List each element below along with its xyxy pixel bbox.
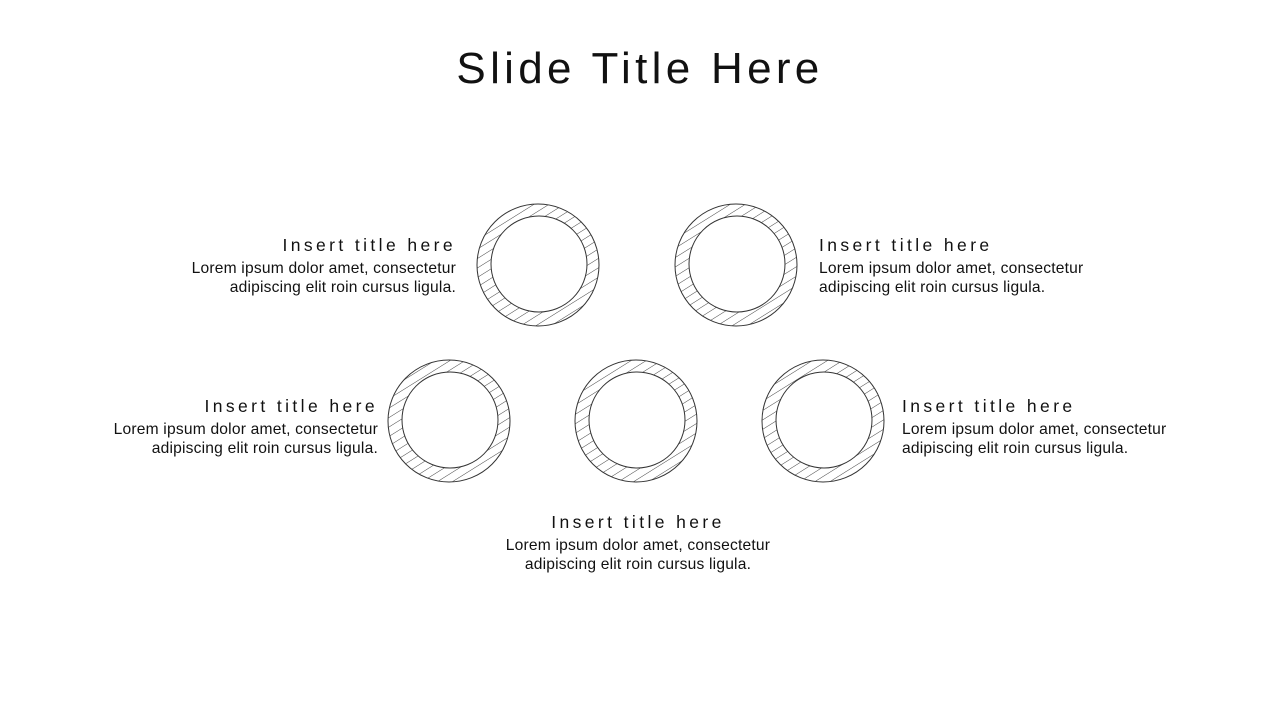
circle 4 [575, 360, 697, 482]
text: top left [192, 235, 456, 296]
circle 5 [762, 360, 884, 482]
text: top right [819, 235, 1083, 296]
text: mid left: Insert title here [204, 396, 378, 416]
circle 1 [477, 204, 599, 326]
circle 3 [388, 360, 510, 482]
circle 2 [675, 204, 797, 326]
text: top right: Insert title here [819, 235, 993, 255]
text: mid left: adipiscing elit roin cursus ligula. [152, 440, 378, 457]
text: top right: adipiscing elit roin cursus ligula. [819, 279, 1045, 296]
text: mid left [114, 396, 378, 457]
text: mid right: adipiscing elit roin cursus ligula. [902, 440, 1128, 457]
title: Slide Title Here [456, 44, 824, 93]
text: bottom center: Lorem ipsum dolor amet, consectetur [506, 537, 770, 554]
text: bottom center: adipiscing elit roin cursus ligula. [525, 556, 751, 573]
text: top right: Lorem ipsum dolor amet, consectetur [819, 260, 1083, 277]
text: mid right: Lorem ipsum dolor amet, consectetur [902, 421, 1166, 438]
text: mid right [902, 396, 1166, 457]
text: bottom center: Insert title here [551, 512, 725, 532]
text: top left: adipiscing elit roin cursus ligula. [230, 279, 456, 296]
text: mid left: Lorem ipsum dolor amet, consectetur [114, 421, 378, 438]
text: top left: Lorem ipsum dolor amet, consectetur [192, 260, 456, 277]
text: bottom center [506, 512, 770, 573]
text: mid right: Insert title here [902, 396, 1076, 416]
text: top left: Insert title here [282, 235, 456, 255]
